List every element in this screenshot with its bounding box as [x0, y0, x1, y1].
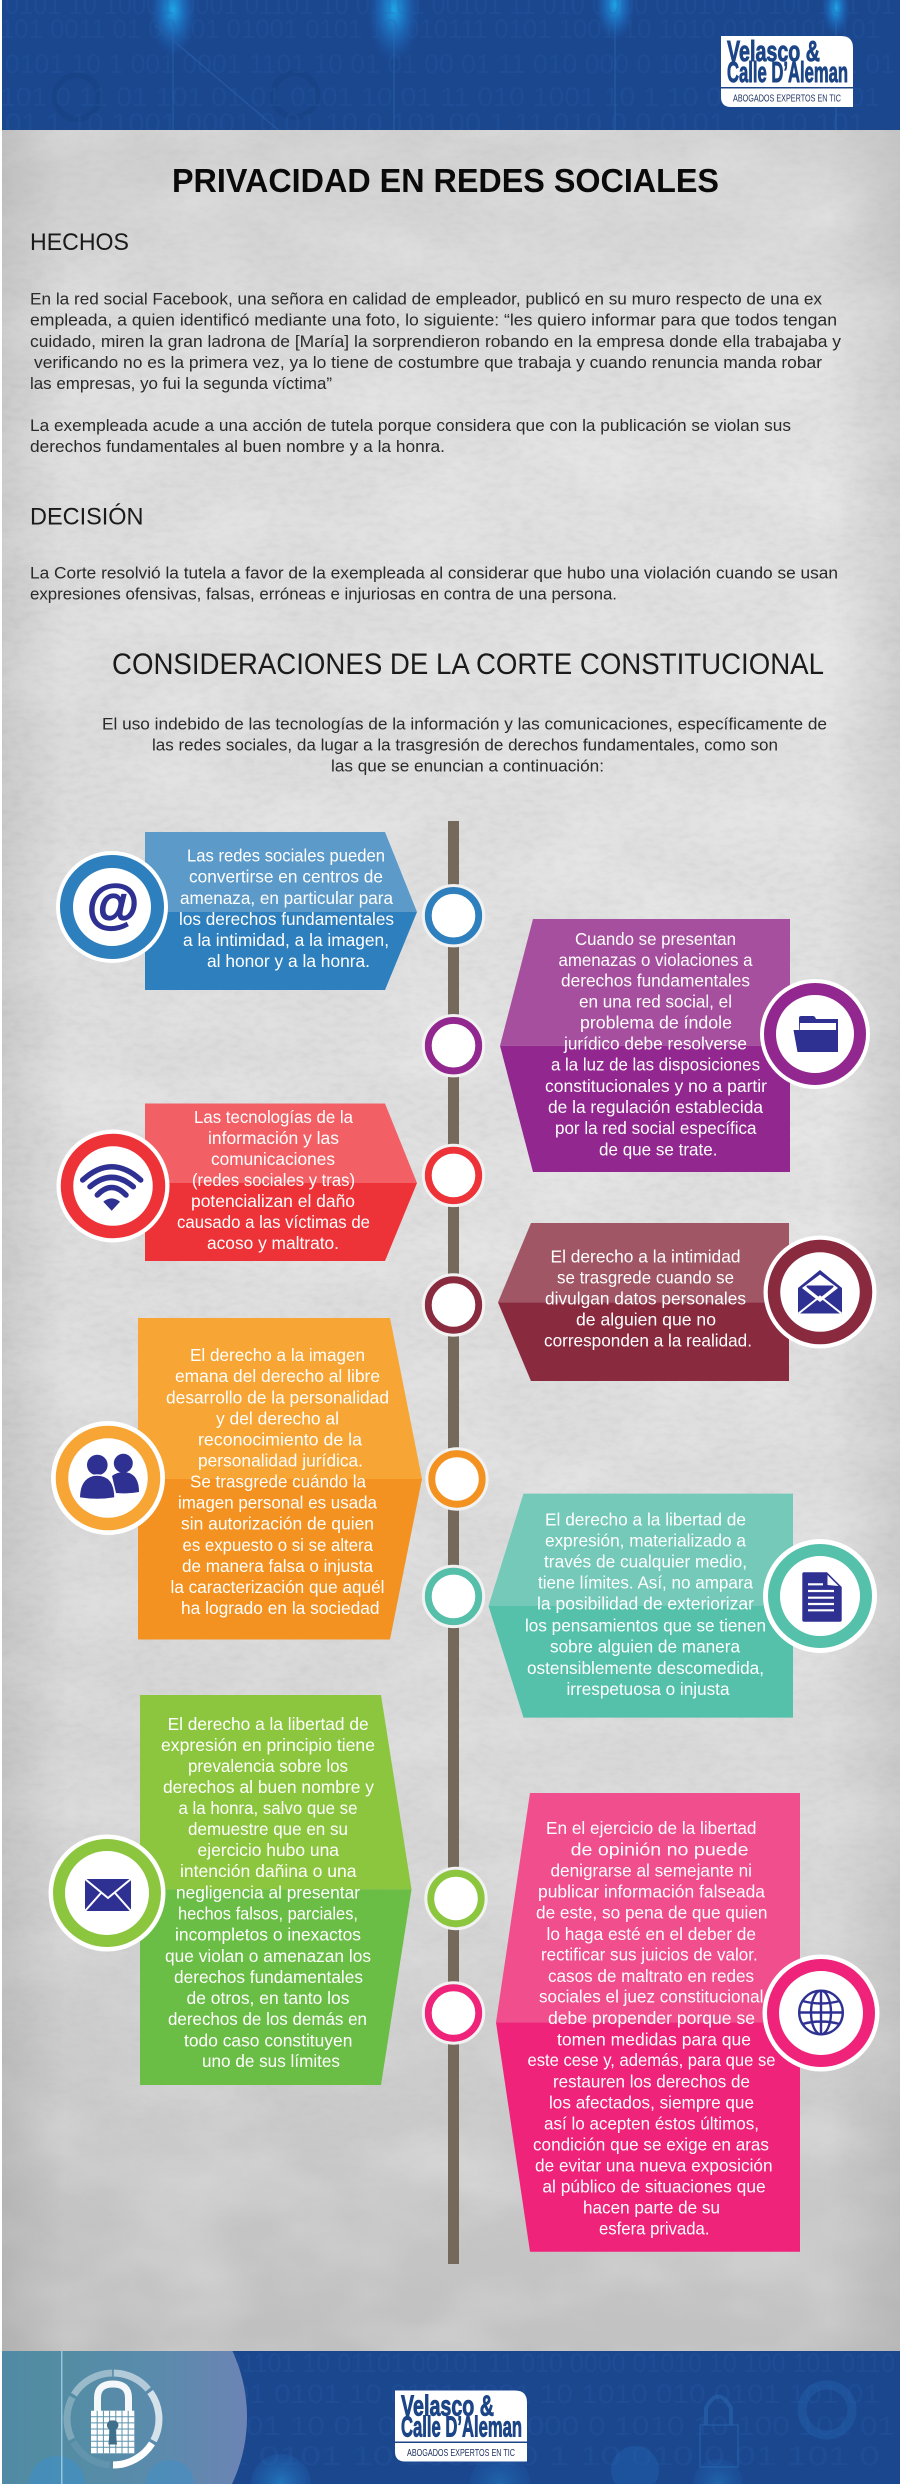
- heading: consideraciones: CONSIDERACIONES DE LA CORTE CONSTITUCIONAL: [112, 648, 824, 681]
- panel: libertad de expresion, prevalencia: a la honra, salvo que se: [178, 1798, 358, 1818]
- panel: libertad de opinion: de opinión no puede: [571, 1839, 748, 1859]
- panel: tecnologias potencializan el dano: comunicaciones: [211, 1149, 335, 1169]
- footer banner: 101 0 11 0001 1101 10 01 01 00 010 000 0 1010 10 100 101 01: [5, 2411, 895, 2441]
- header banner: 101 0 11 01 101 01 01 0101 10 01 11 010 1001 10 1 10 010 0101 101: [0, 82, 880, 112]
- panel: libertad de expresion, prevalencia: [140, 1695, 412, 2085]
- logo: footer: Velasco &: [401, 2390, 494, 2422]
- panel: libertad de expresion, limites: irrespetuosa o injusta: [566, 1679, 730, 1699]
- panel: derecho a la intimidad: El derecho a la intimidad: [550, 1246, 740, 1266]
- panel: libertad de opinion: denigrarse al semejante ni: [550, 1861, 752, 1881]
- text block: hechos: La exempleada acude a una acción de tutela porque considera que con la publicación se violan sus: [30, 416, 791, 435]
- panel: disposiciones constitucionales: Cuando se presentan: [575, 929, 736, 949]
- panel: derecho a la imagen: El derecho a la imagen: [190, 1345, 365, 1365]
- text block: hechos: derechos fundamentales al buen nombre y a la honra.: [30, 437, 445, 456]
- panel: libertad de opinion: [496, 1793, 800, 2252]
- logo: footer: [395, 2390, 527, 2462]
- panel: libertad de expresion, prevalencia: derechos al buen nombre y: [163, 1777, 374, 1797]
- panel: tecnologias potencializan el dano: potencializan el daño: [191, 1191, 355, 1211]
- logo: footer: ABOGADOS EXPERTOS EN TIC: [407, 2448, 515, 2459]
- panel: derecho a la imagen: ha logrado en la sociedad: [181, 1598, 380, 1618]
- panel: libertad de expresion, prevalencia: expresión en principio tiene: [161, 1735, 375, 1755]
- icon: users: [51, 1421, 165, 1535]
- panel: libertad de expresion, limites: la posibilidad de exteriorizar: [537, 1594, 754, 1614]
- panel: redes sociales, centros de amenaza: convertirse en centros de: [189, 867, 383, 887]
- header banner: 01 1 10 1001 0001 0 01 10 0 101 00 1 11 010 0 0 0101 10 10 101: [5, 108, 865, 138]
- text block: hechos: cuidado, miren la gran ladrona de [María] la sorprendieron robando en la empresa donde ella trabajaba y: [30, 332, 842, 351]
- panel: libertad de opinion: de evitar una nueva exposición: [535, 2155, 773, 2175]
- panel: tecnologias potencializan el dano: acoso y maltrato.: [207, 1233, 339, 1253]
- logo: footer: Calle D’Aleman: [401, 2412, 522, 2444]
- panel: libertad de expresion, prevalencia: derechos de los demás en: [168, 2009, 367, 2029]
- panel: derecho a la intimidad: [498, 1223, 789, 1381]
- header banner: 0101 10 1 001 0001 1101 10 01 01 00 01 11 010 000 0 1010 10 100 101 01: [5, 49, 895, 79]
- panel: tecnologias potencializan el dano: causado a las víctimas de: [177, 1212, 370, 1232]
- panel: disposiciones constitucionales: derechos fundamentales: [561, 971, 750, 991]
- text block: hechos: En la red social Facebook, una señora en calidad de empleador, publicó en su muro respecto de una ex: [30, 290, 823, 308]
- header banner: [0, 0, 900, 140]
- icon: document: [763, 1539, 877, 1653]
- panel: tecnologias potencializan el dano: [145, 1104, 417, 1261]
- panel: derecho a la imagen: Se trasgrede cuándo la: [190, 1472, 366, 1492]
- text block: introduction: las que se enuncian a continuación:: [331, 756, 604, 776]
- panel: libertad de opinion: rectificar sus juicios de valor.: [541, 1945, 758, 1965]
- icon: padlock: [67, 2373, 159, 2465]
- panel: libertad de expresion, limites: ostensiblemente descomedida,: [527, 1658, 764, 1678]
- header banner: 101 0011 01 00101 01001 0101 10 010111 0101 1001 10 1010 010 0101 101: [0, 14, 880, 44]
- panel: libertad de opinion: restauren los derechos de: [553, 2071, 750, 2091]
- panel: libertad de opinion: al público de situaciones que: [542, 2177, 766, 2197]
- panel: redes sociales, centros de amenaza: amenaza, en particular para: [180, 888, 393, 908]
- title: PRIVACIDAD EN REDES SOCIALES: [172, 163, 719, 200]
- panel: redes sociales, centros de amenaza: los derechos fundamentales: [179, 909, 394, 929]
- panel: redes sociales, centros de amenaza: [145, 832, 417, 990]
- panel: libertad de opinion: de este, so pena de que quien: [536, 1903, 768, 1923]
- icon: closed envelope: [48, 1834, 166, 1952]
- panel: libertad de expresion, limites: expresión, materializado a: [545, 1531, 746, 1551]
- text block: decision: expresiones ofensivas, falsas, erróneas e injuriosas en contra de una persona.: [30, 584, 617, 604]
- panel: derecho a la imagen: de manera falsa o injusta: [182, 1556, 373, 1576]
- panel: disposiciones constitucionales: [500, 919, 790, 1172]
- panel: redes sociales, centros de amenaza: a la intimidad, a la imagen,: [183, 930, 389, 950]
- panel: disposiciones constitucionales: constitucionales y no a partir: [545, 1076, 767, 1096]
- panel: derecho a la imagen: desarrollo de la personalidad: [166, 1388, 389, 1408]
- footer banner: 01 0 101 01 01 0101 10 1001 10 1 10 010 0 01 101 0: [0, 2441, 880, 2471]
- panel: libertad de expresion, prevalencia: hechos falsos, parciales,: [178, 1904, 358, 1924]
- logo: header: [721, 36, 853, 107]
- icon: wifi: [56, 1130, 170, 1242]
- panel: libertad de opinion: esfera privada.: [599, 2219, 710, 2239]
- panel: disposiciones constitucionales: de que se trate.: [599, 1139, 718, 1159]
- icon: at sign: @: [87, 874, 139, 934]
- text block: decision: [30, 564, 838, 604]
- panel: derecho a la intimidad: divulgan datos personales: [545, 1288, 746, 1308]
- panel: redes sociales, centros de amenaza: al honor y a la honra.: [207, 951, 370, 971]
- panel: tecnologias potencializan el dano: Las tecnologías de la: [194, 1107, 353, 1127]
- footer banner: 01 101 0 101 01001 0101 10 0101 1001 10 1010 010 0101 101 01: [0, 2379, 880, 2409]
- logo: header: ABOGADOS EXPERTOS EN TIC: [733, 94, 841, 104]
- panel: libertad de expresion, limites: sobre alguien de manera: [550, 1637, 740, 1657]
- panel: libertad de expresion, prevalencia: uno de sus límites: [202, 2051, 340, 2071]
- panel: derecho a la imagen: personalidad jurídica.: [198, 1451, 363, 1471]
- panel: tecnologias potencializan el dano: información y las: [208, 1128, 339, 1148]
- panel: libertad de opinion: debe propender porque se: [548, 2008, 755, 2028]
- panel: libertad de expresion, limites: los pensamientos que se tienen: [525, 1616, 766, 1636]
- panel: disposiciones constitucionales: en una red social, el: [579, 992, 732, 1012]
- panel: derecho a la imagen: sin autorización de quien: [181, 1514, 374, 1534]
- panel: derecho a la imagen: es expuesto o si se altera: [182, 1535, 373, 1555]
- panel: libertad de opinion: En el ejercicio de la libertad: [546, 1818, 756, 1838]
- panel: libertad de expresion, prevalencia: todo caso constituyen: [184, 2030, 352, 2050]
- panel: libertad de expresion, prevalencia: prevalencia sobre los: [188, 1756, 348, 1776]
- text block: hechos: [30, 290, 842, 456]
- panel: derecho a la imagen: emana del derecho al libre: [175, 1366, 380, 1386]
- panel: libertad de expresion, limites: tiene límites. Así, no ampara: [538, 1573, 753, 1593]
- panel: derecho a la intimidad: se trasgrede cuando se: [557, 1268, 734, 1288]
- panel: libertad de opinion: hacen parte de su: [583, 2197, 720, 2217]
- text block: hechos: empleada, a quien identificó mediante una foto, lo siguiente: “les quiero informar para que todos tengan: [30, 310, 837, 330]
- panel: libertad de opinion: casos de maltrato en redes: [548, 1966, 754, 1986]
- panel: derecho a la imagen: imagen personal es usada: [178, 1493, 377, 1513]
- text block: introduction: [102, 714, 827, 776]
- footer banner: [2, 2351, 900, 2484]
- panel: disposiciones constitucionales: a la luz de las disposiciones: [551, 1055, 760, 1075]
- panel: libertad de opinion: los afectados, siempre que: [549, 2093, 754, 2113]
- timeline nodes: [423, 886, 487, 2043]
- panel: derecho a la intimidad: corresponden a la realidad.: [544, 1331, 752, 1351]
- panel: libertad de expresion, prevalencia: demuestre que en su: [188, 1819, 348, 1839]
- panel: disposiciones constitucionales: jurídico debe resolverse: [563, 1034, 747, 1054]
- panel: tecnologias potencializan el dano: (redes sociales y tras): [192, 1170, 355, 1190]
- panel: libertad de expresion, prevalencia: de otros, en tanto los: [186, 1988, 350, 2008]
- panel: libertad de expresion, prevalencia: El derecho a la libertad de: [168, 1714, 369, 1734]
- icon: at sign: [56, 851, 168, 963]
- logo: header: Velasco &: [727, 36, 820, 68]
- heading: decision: DECISIÓN: [30, 504, 144, 531]
- panel: libertad de opinion: condición que se exige en aras: [533, 2135, 769, 2155]
- panel: libertad de expresion, limites: [488, 1494, 793, 1718]
- panel: libertad de opinion: este cese y, además, para que se: [528, 2050, 776, 2070]
- icon: folder: [760, 979, 870, 1089]
- panel: libertad de expresion, limites: través de cualquier medio,: [544, 1552, 747, 1572]
- icon: open envelope: [764, 1236, 876, 1348]
- text block: introduction: las redes sociales, da lugar a la trasgresión de derechos fundamentales, como son: [152, 736, 778, 754]
- panel: libertad de opinion: así lo acepten éstos últimos,: [544, 2113, 759, 2133]
- text block: hechos: las empresas, yo fui la segunda víctima”: [30, 374, 332, 393]
- panel: libertad de expresion, limites: El derecho a la libertad de: [545, 1510, 746, 1530]
- text block: introduction: El uso indebido de las tecnologías de la información y las comunicaciones, específicamente de: [102, 714, 827, 733]
- timeline spine: [448, 821, 459, 2264]
- panel: derecho a la imagen: [138, 1318, 422, 1640]
- panel: disposiciones constitucionales: amenazas o violaciones a: [558, 950, 753, 970]
- panel: derecho a la imagen: reconocimiento de la: [198, 1430, 362, 1450]
- panel: disposiciones constitucionales: problema de índole: [580, 1013, 732, 1033]
- panel: disposiciones constitucionales: de la regulación establecida: [548, 1097, 763, 1117]
- heading: hechos: HECHOS: [30, 229, 129, 256]
- panel: libertad de expresion, prevalencia: intención dañina o una: [180, 1861, 357, 1881]
- panel: derecho a la intimidad: de alguien que no: [576, 1310, 716, 1330]
- panel: disposiciones constitucionales: por la red social específica: [555, 1118, 757, 1138]
- panel: redes sociales, centros de amenaza: Las redes sociales pueden: [187, 846, 385, 866]
- text block: decision: La Corte resolvió la tutela a favor de la exempleada al considerar que hubo una violación cuando se usan: [30, 564, 838, 582]
- panel: libertad de opinion: sociales el juez constitucional: [539, 1987, 763, 2007]
- panel: libertad de expresion, prevalencia: ejercicio hubo una: [198, 1840, 339, 1860]
- panel: libertad de expresion, prevalencia: derechos fundamentales: [174, 1967, 363, 1987]
- panel: libertad de opinion: publicar información falseada: [538, 1881, 765, 1901]
- panel: libertad de opinion: tomen medidas para que: [557, 2029, 751, 2049]
- panel: libertad de opinion: lo haga esté en el deber de: [546, 1924, 756, 1944]
- panel: libertad de expresion, prevalencia: incompletos o inexactos: [175, 1924, 361, 1944]
- panel: libertad de expresion, prevalencia: negligencia al presentar: [176, 1882, 360, 1902]
- text block: hechos: verificando no es la primera vez, ya lo tiene de costumbre que trabaja y cuando renuncia manda robar: [34, 353, 822, 372]
- panel: derecho a la imagen: y del derecho al: [216, 1408, 339, 1428]
- panel: derecho a la imagen: la caracterización que aquél: [170, 1577, 384, 1597]
- panel: libertad de expresion, prevalencia: que violan o amenazan los: [165, 1946, 371, 1966]
- icon: globe: [762, 1954, 880, 2072]
